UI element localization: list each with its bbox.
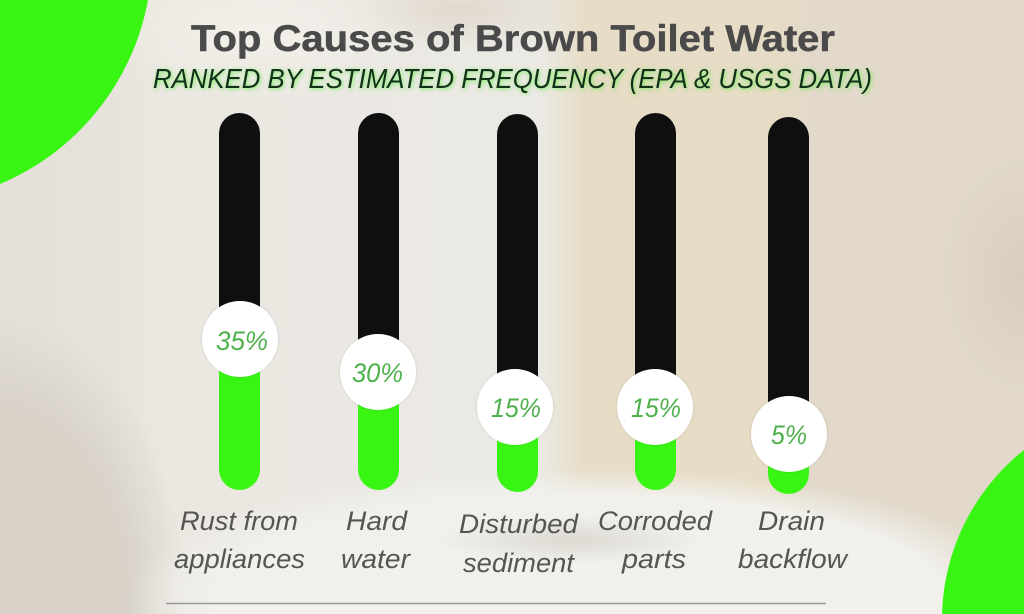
bar: hard water 30% (340, 113, 416, 490)
decorative green circle: bottom right (942, 450, 1024, 614)
label: drain backflow (738, 506, 849, 574)
label: drain backflow: backflow (738, 544, 849, 574)
label: rust from appliances (174, 506, 305, 574)
label: hard water: water (341, 544, 411, 574)
label: disturbed sediment: sediment (463, 548, 576, 578)
label: corroded parts: parts (621, 544, 686, 574)
bar: rust from appliances 35%: 35% (216, 326, 268, 356)
bar: corroded parts 15%: 15% (631, 393, 681, 423)
label: hard water: Hard (346, 506, 408, 536)
label: corroded parts: Corroded (598, 506, 713, 536)
bar: drain backflow 5% (751, 117, 827, 494)
label: disturbed sediment: Disturbed (459, 509, 579, 539)
bar chart (202, 113, 827, 494)
label: disturbed sediment (459, 509, 579, 578)
decorative green circle: top left (0, 0, 148, 184)
bar: disturbed sediment 15%: 15% (491, 393, 541, 423)
bar: drain backflow 5%: 5% (771, 420, 807, 450)
bar: hard water 30%: 30% (352, 358, 403, 388)
bar: disturbed sediment 15% (477, 114, 553, 492)
title: Top Causes of Brown Toilet Water (191, 18, 835, 59)
label: corroded parts (598, 506, 713, 574)
label: rust from appliances: appliances (174, 544, 305, 574)
subtitle: RANKED BY ESTIMATED FREQUENCY (EPA & USGS DATA) (153, 63, 872, 94)
label: rust from appliances: Rust from (180, 506, 298, 536)
label: drain backflow: Drain (758, 506, 825, 536)
bar: corroded parts 15% (617, 113, 693, 490)
bar: rust from appliances 35% (202, 113, 278, 490)
label: hard water (341, 506, 411, 574)
